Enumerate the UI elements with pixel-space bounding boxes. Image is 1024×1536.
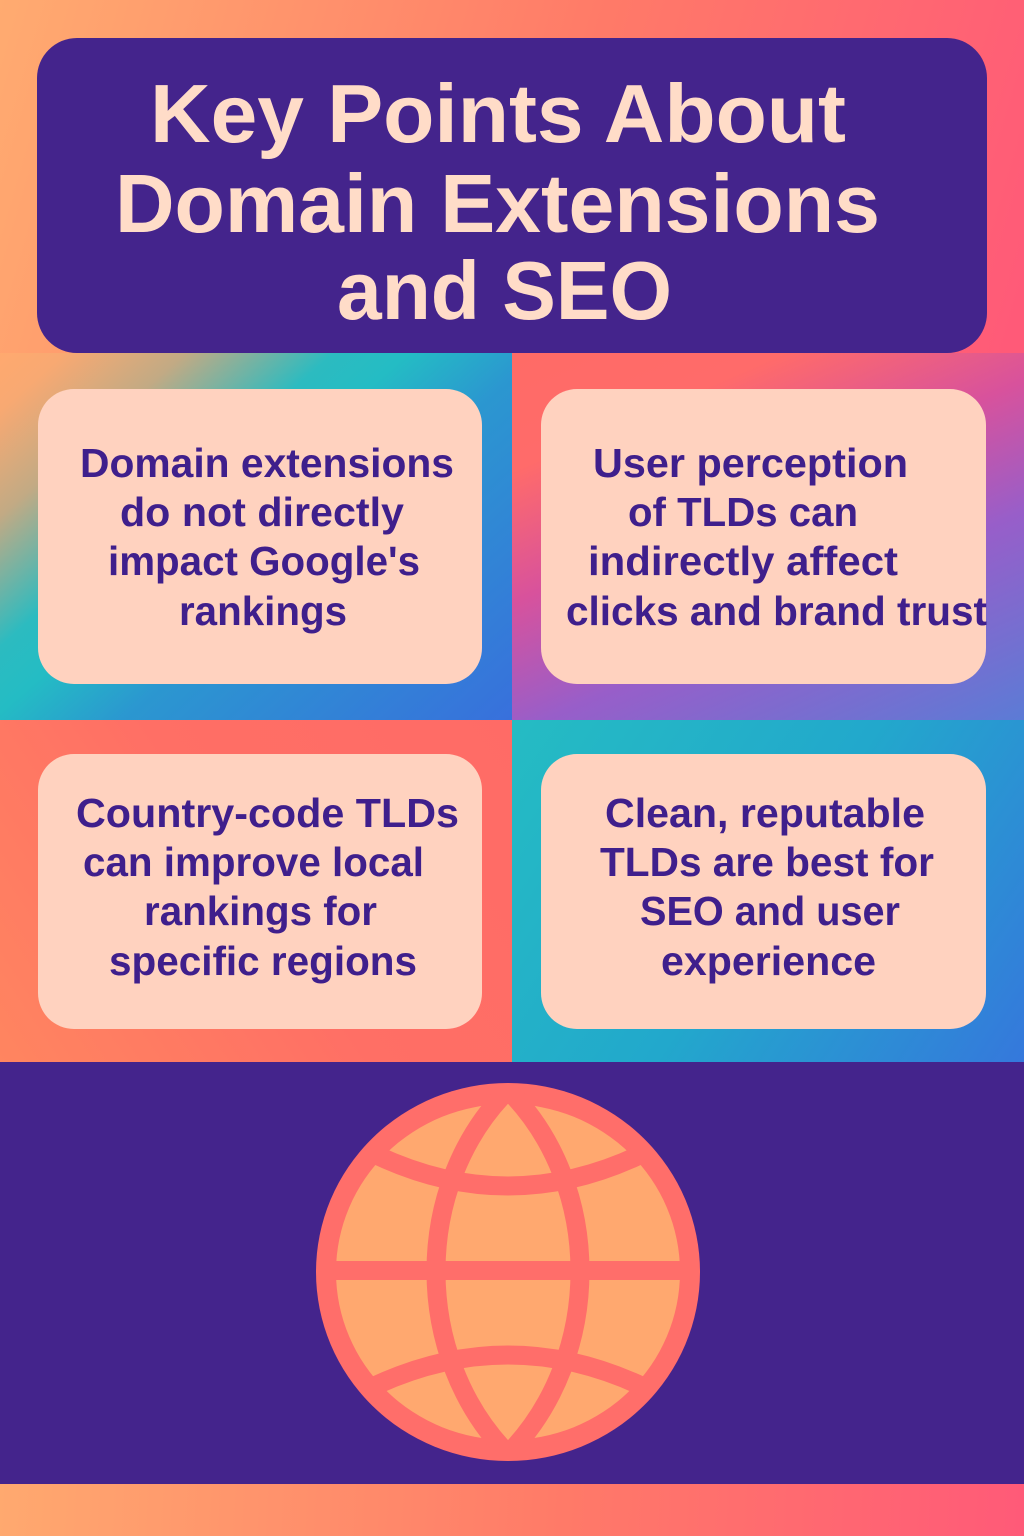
card text: TLDs are best for xyxy=(600,839,934,885)
card text: impact Google's xyxy=(108,538,420,584)
card: country-code TLDs xyxy=(38,754,482,1029)
background: panel top right xyxy=(512,353,1024,720)
card text: rankings xyxy=(179,588,347,634)
card text: rankings for xyxy=(144,888,377,934)
card text: clicks and brand trust xyxy=(566,588,987,634)
card: clean reputable TLDs xyxy=(541,754,986,1029)
card text: Domain extensions xyxy=(80,440,454,486)
title: Key Points About xyxy=(150,67,846,160)
card text: of TLDs can xyxy=(628,489,858,535)
card text: indirectly affect xyxy=(588,538,898,584)
card text: can improve local xyxy=(83,839,424,885)
title xyxy=(115,67,880,337)
card text xyxy=(600,790,934,984)
background: panel top left xyxy=(0,353,512,720)
card text: SEO and user xyxy=(640,888,900,934)
footer gradient strip xyxy=(0,1484,1024,1536)
background: panel bottom left xyxy=(0,720,512,1062)
card: domain extensions do not impact rankings xyxy=(38,389,482,684)
card text: Country-code TLDs xyxy=(76,790,459,836)
card text xyxy=(76,790,459,984)
icon: globe xyxy=(316,1083,700,1461)
title: and SEO xyxy=(337,244,672,337)
card: user perception of TLDs xyxy=(541,389,987,684)
panel: globe band xyxy=(0,1062,1024,1484)
card text: do not directly xyxy=(120,489,404,535)
title: Domain Extensions xyxy=(115,157,880,250)
background: panel bottom right xyxy=(512,720,1024,1062)
card text: specific regions xyxy=(109,938,417,984)
card text xyxy=(80,440,454,634)
panel: title banner xyxy=(37,38,987,353)
card text: User perception xyxy=(593,440,908,486)
card text xyxy=(566,440,987,634)
background: top gradient band xyxy=(0,0,1024,354)
card text: experience xyxy=(661,938,876,984)
card text: Clean, reputable xyxy=(605,790,925,836)
